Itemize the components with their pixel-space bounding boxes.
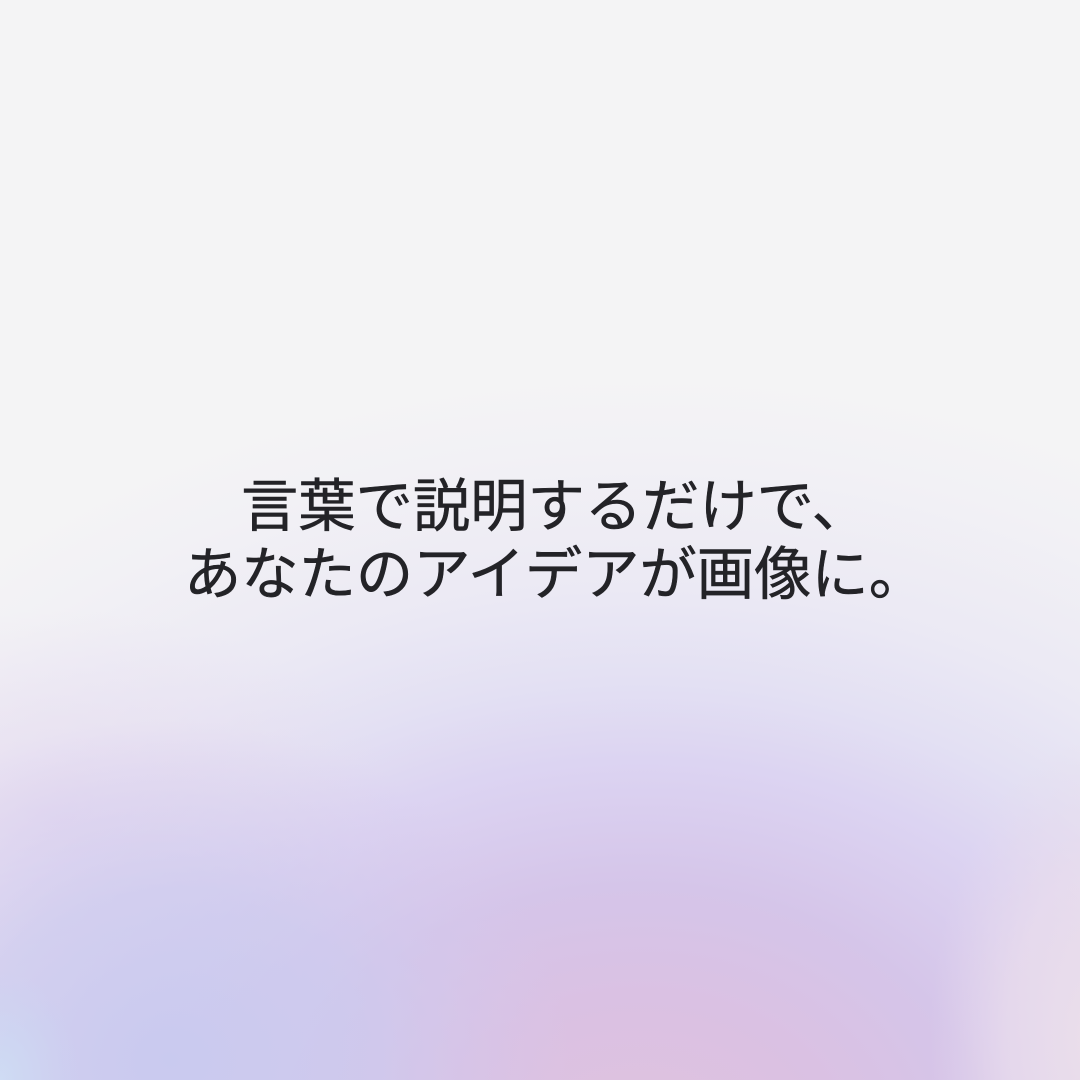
- title text: [184, 475, 926, 607]
- title text: 言葉で説明するだけで、: [241, 475, 869, 539]
- title text: あなたのアイデアが画像に。: [184, 543, 926, 607]
